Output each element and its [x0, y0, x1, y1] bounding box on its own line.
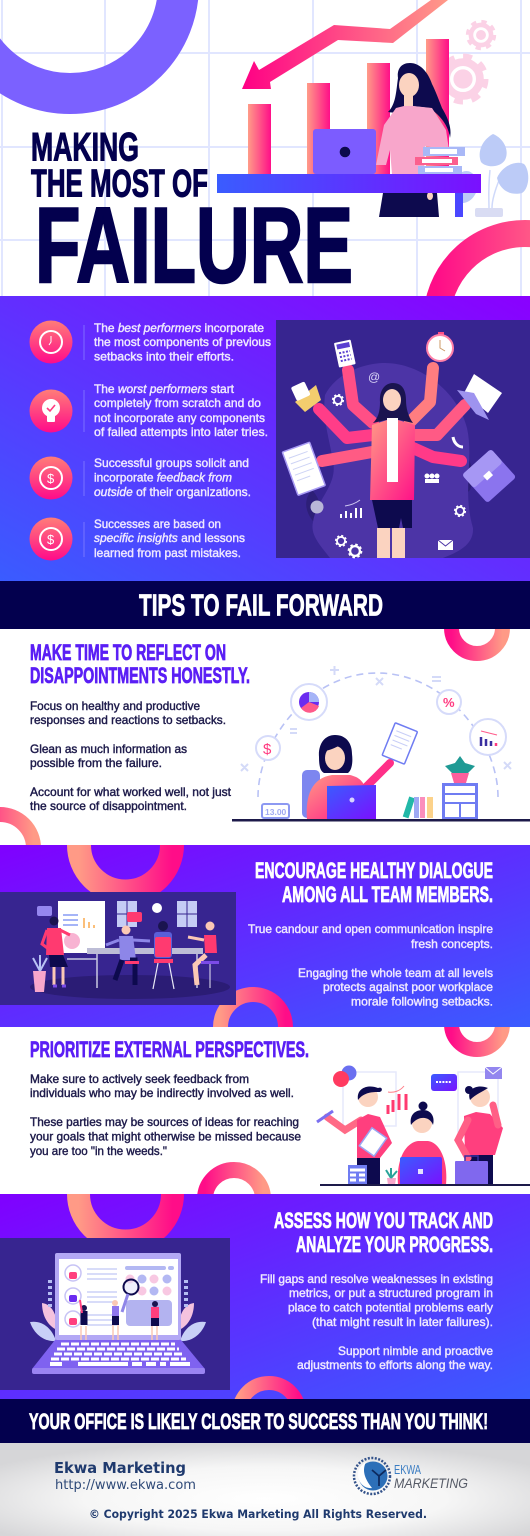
illustration: desk [217, 174, 481, 217]
chart bubble: dollar: $ [263, 741, 272, 758]
pink ring decoration [436, 234, 530, 410]
clipboard [382, 723, 417, 764]
text: successful groups: outside of their organizations. [94, 485, 251, 499]
presenter [42, 916, 70, 986]
text: worst performers: of failed attempts into later tries. [94, 425, 268, 439]
ring decoration [444, 1027, 510, 1057]
ring decoration [234, 1376, 304, 1399]
panel: research findings [0, 296, 530, 581]
text: worst performers: not incorporate any components [94, 411, 265, 425]
footer url: http://www.ekwa.com [55, 1478, 196, 1493]
logo: Ekwa Marketing: MARKETING [394, 1476, 468, 1491]
ring decoration [197, 1162, 271, 1194]
text: best performers: The best performers incorporate [94, 321, 264, 335]
footer company name: Ekwa Marketing [54, 1459, 186, 1477]
icon: lightbulb badge [30, 390, 72, 432]
ring decoration [452, 602, 502, 654]
chart bubble: dollar [256, 736, 280, 760]
arrow falling to the left [242, 0, 448, 89]
text: reflect body: Account for what worked well, not just [30, 785, 232, 799]
logo: Ekwa Marketing [354, 1458, 468, 1494]
text: assess body: Support nimble and proactive [338, 1344, 493, 1358]
bar chart [248, 39, 449, 174]
leaves [30, 1280, 206, 1341]
calculator [334, 340, 356, 368]
person right [455, 1086, 503, 1185]
panel: laptop illustration [0, 1238, 230, 1390]
text: assess body: metrics, or put a structured program in [289, 1286, 493, 1300]
footer copyright: © Copyright 2025 Ekwa Marketing All Rights Reserved. [89, 1507, 427, 1521]
text: dialogue body: Engaging the whole team at all levels [298, 966, 493, 980]
text: reflect body: responses and reactions to setbacks. [30, 713, 226, 727]
panel: section four background [0, 1194, 530, 1399]
text: successful groups: incorporate feedback from [94, 470, 232, 484]
text: dialogue body: True candour and open communication inspire [248, 922, 493, 936]
chart bubble: bars [470, 719, 506, 755]
seated man [106, 926, 150, 985]
text: external perspectives body [30, 1072, 301, 1158]
text: assess body: (that might result in later failures). [312, 1315, 493, 1329]
seated woman [188, 922, 219, 988]
text: worst performers: completely from scratch and do [94, 396, 261, 410]
person center [398, 1102, 446, 1185]
banner: tips to fail forward: TIPS TO FAIL FORWARD [139, 588, 383, 622]
title: FAILURE [35, 185, 353, 305]
icon: dollar badge [30, 456, 72, 500]
speech bubbles [333, 1066, 502, 1091]
text: external perspectives body: your goals that might otherwise be missed because [30, 1130, 301, 1144]
panel: header background [0, 0, 530, 296]
title [31, 126, 353, 305]
icon: pale plant [460, 134, 528, 217]
tiny people [80, 1300, 159, 1341]
stopwatch [427, 332, 453, 361]
illustration: analyst at desk [232, 666, 530, 822]
small icons [310, 370, 465, 557]
text: successful groups: Successful groups solicit and [94, 456, 249, 470]
desk clock [262, 804, 289, 818]
desk clock: 13.00 [265, 807, 287, 817]
text: external perspectives body: you are too "in the weeds." [30, 1144, 167, 1158]
legs [377, 528, 405, 558]
briefcase [462, 449, 516, 503]
person left [317, 1086, 392, 1185]
panel: meeting illustration [0, 892, 236, 1005]
text: best performers: setbacks into their efforts. [94, 350, 234, 364]
text: external perspectives body: individuals who may be indirectly involved as well. [30, 1086, 294, 1100]
text: specific insights: Successes are based on [94, 517, 221, 531]
title: MAKING [31, 126, 139, 170]
text: worst performers [94, 382, 268, 439]
ring decoration [67, 845, 184, 892]
chart bubble: pie [291, 684, 327, 720]
panel: section two background [0, 845, 530, 1027]
heading: assess [274, 1208, 493, 1257]
purple ring decoration [0, 0, 178, 94]
screen [55, 1253, 181, 1340]
potted plant [33, 955, 47, 992]
heading: reflect: MAKE TIME TO REFLECT ON [30, 640, 226, 665]
icon: clock badge [30, 320, 72, 364]
illustration: laptop [313, 129, 376, 174]
header grid [0, 0, 530, 296]
icon: dollar badge [30, 518, 72, 560]
text: specific insights [94, 517, 245, 560]
small icons: @ [368, 370, 380, 384]
panel: section three background [0, 1027, 530, 1194]
text: specific insights: specific insights and lessons [94, 531, 245, 545]
text: reflect body [30, 699, 232, 813]
heading: reflect [30, 640, 250, 688]
icon: dollar badge: $ [47, 471, 55, 486]
text: dialogue body: morale following setbacks. [351, 994, 493, 1008]
text: dialogue body: protects against poor workplace [323, 980, 493, 994]
chart bubble: percent [437, 690, 461, 714]
text: assess body: Fill gaps and resolve weaknesses in existing [260, 1272, 493, 1286]
ring decoration [67, 1194, 184, 1238]
icon: pale gears [441, 22, 494, 101]
text: specific insights: learned from past mistakes. [94, 546, 241, 560]
illustration: three colleagues [317, 1066, 530, 1186]
arms [319, 368, 465, 461]
cabinet with plant [442, 756, 478, 820]
heading: reflect: DISAPPOINTMENTS HONESTLY. [30, 663, 250, 688]
panel: multi-tasking illustration [276, 320, 530, 558]
text: successful groups [94, 456, 251, 499]
panel: footer background [0, 1443, 530, 1536]
magnifier [122, 1280, 138, 1312]
text: best performers: the most components of previous [94, 335, 271, 349]
skirt [372, 500, 412, 528]
heading: external perspectives: PRIORITIZE EXTERNAL PERSPECTIVES. [30, 1037, 309, 1062]
text: external perspectives body: Make sure to actively seek feedback from [30, 1072, 249, 1086]
text: best performers [94, 321, 271, 364]
panel: section one background [0, 629, 530, 845]
small cabinet and plant [348, 1165, 397, 1185]
text: dialogue body: fresh concepts. [411, 937, 493, 951]
text: assess body: place to catch potential problems early [288, 1300, 493, 1314]
ring decoration [0, 814, 34, 882]
banner: closing message [0, 1399, 530, 1443]
head and hair [373, 383, 413, 423]
text: assess body: adjustments to efforts along the way. [297, 1358, 493, 1372]
banner: tips to fail forward [0, 581, 530, 629]
jacket [370, 420, 415, 500]
open laptop [457, 374, 502, 420]
text: reflect body: possible from the failure. [30, 756, 162, 770]
illustration: woman at desk [376, 63, 451, 217]
illustration: stacked books [415, 147, 465, 174]
title: THE MOST OF [31, 162, 208, 206]
text: external perspectives body: These parties may be sources of ideas for reaching [30, 1115, 299, 1129]
dividers [83, 325, 85, 557]
chart bubble: percent: % [443, 695, 455, 710]
text: assess body [260, 1272, 493, 1372]
text: worst performers: The worst performers start [94, 382, 235, 396]
binders [403, 797, 433, 818]
folder with paper [291, 381, 321, 412]
text: reflect body: Glean as much information as [30, 742, 187, 756]
text: reflect body: Focus on healthy and productive [30, 699, 200, 713]
ring decoration [213, 987, 293, 1027]
text: reflect body: the source of disappointment. [30, 799, 187, 813]
text: dialogue body [248, 922, 493, 1008]
clipboard [282, 442, 325, 495]
heading: dialogue [255, 858, 493, 907]
laptop base [32, 1340, 205, 1369]
seated person back view [153, 921, 174, 989]
icon: dollar badge: $ [47, 532, 55, 547]
logo: Ekwa Marketing: EKWA [394, 1462, 421, 1477]
